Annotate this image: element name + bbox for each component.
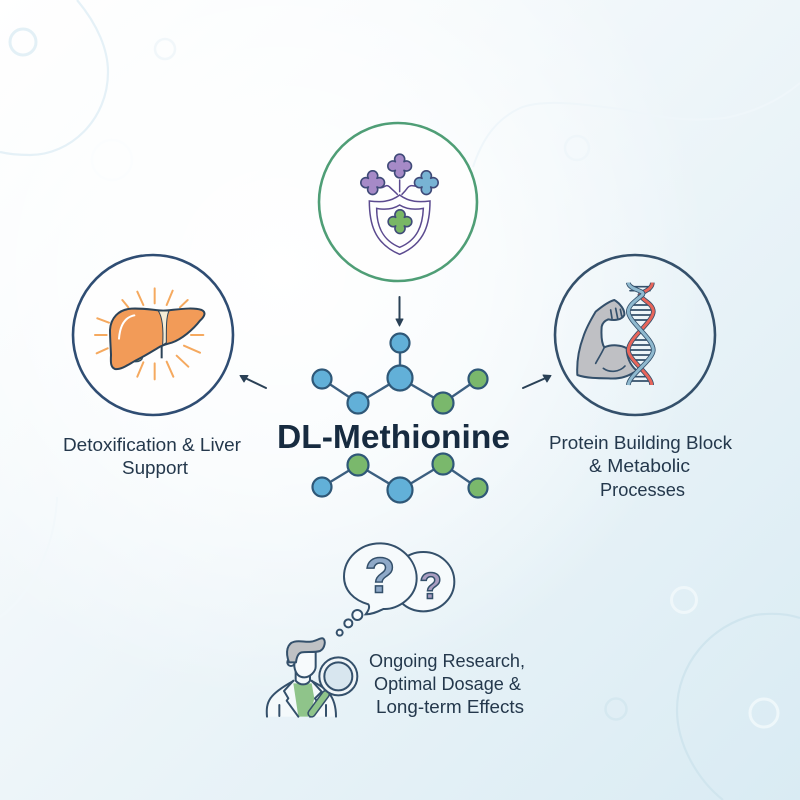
question marks: ? [365,547,395,603]
label: detoxification [63,435,241,478]
label: protein: & Metabolic [589,456,690,476]
question marks [365,547,442,606]
arrow: down to molecule [396,297,403,326]
label: ongoing research [369,651,525,717]
icon: researcher with thought bubbles [267,543,454,717]
label: protein: Protein Building Block [549,433,733,453]
title: DL-Methionine [277,419,510,456]
molecule: bottom chain [312,454,488,502]
thought bubbles [337,543,454,636]
icon circle: liver [73,255,233,415]
label: detoxification: Support [122,458,188,478]
label: ongoing research: Optimal Dosage & [374,674,521,694]
label: protein [549,433,733,500]
icon circle: muscle and DNA [555,255,715,415]
icon circle: immune shield [319,123,477,281]
researcher figure [267,638,357,717]
label: detoxification: Detoxification & Liver [63,435,241,455]
arrow: to muscle [523,375,551,388]
icon: flexed arm and DNA helix [577,283,653,385]
label: ongoing research: Long-term Effects [376,697,524,717]
molecule: top chain [312,334,488,414]
label: ongoing research: Ongoing Research, [369,651,525,671]
question marks: ? [419,565,442,606]
icon: liver with rays [95,288,204,379]
icon: shield with clovers [361,154,438,254]
arrow: to liver [240,376,266,388]
label: protein: Processes [600,480,685,500]
